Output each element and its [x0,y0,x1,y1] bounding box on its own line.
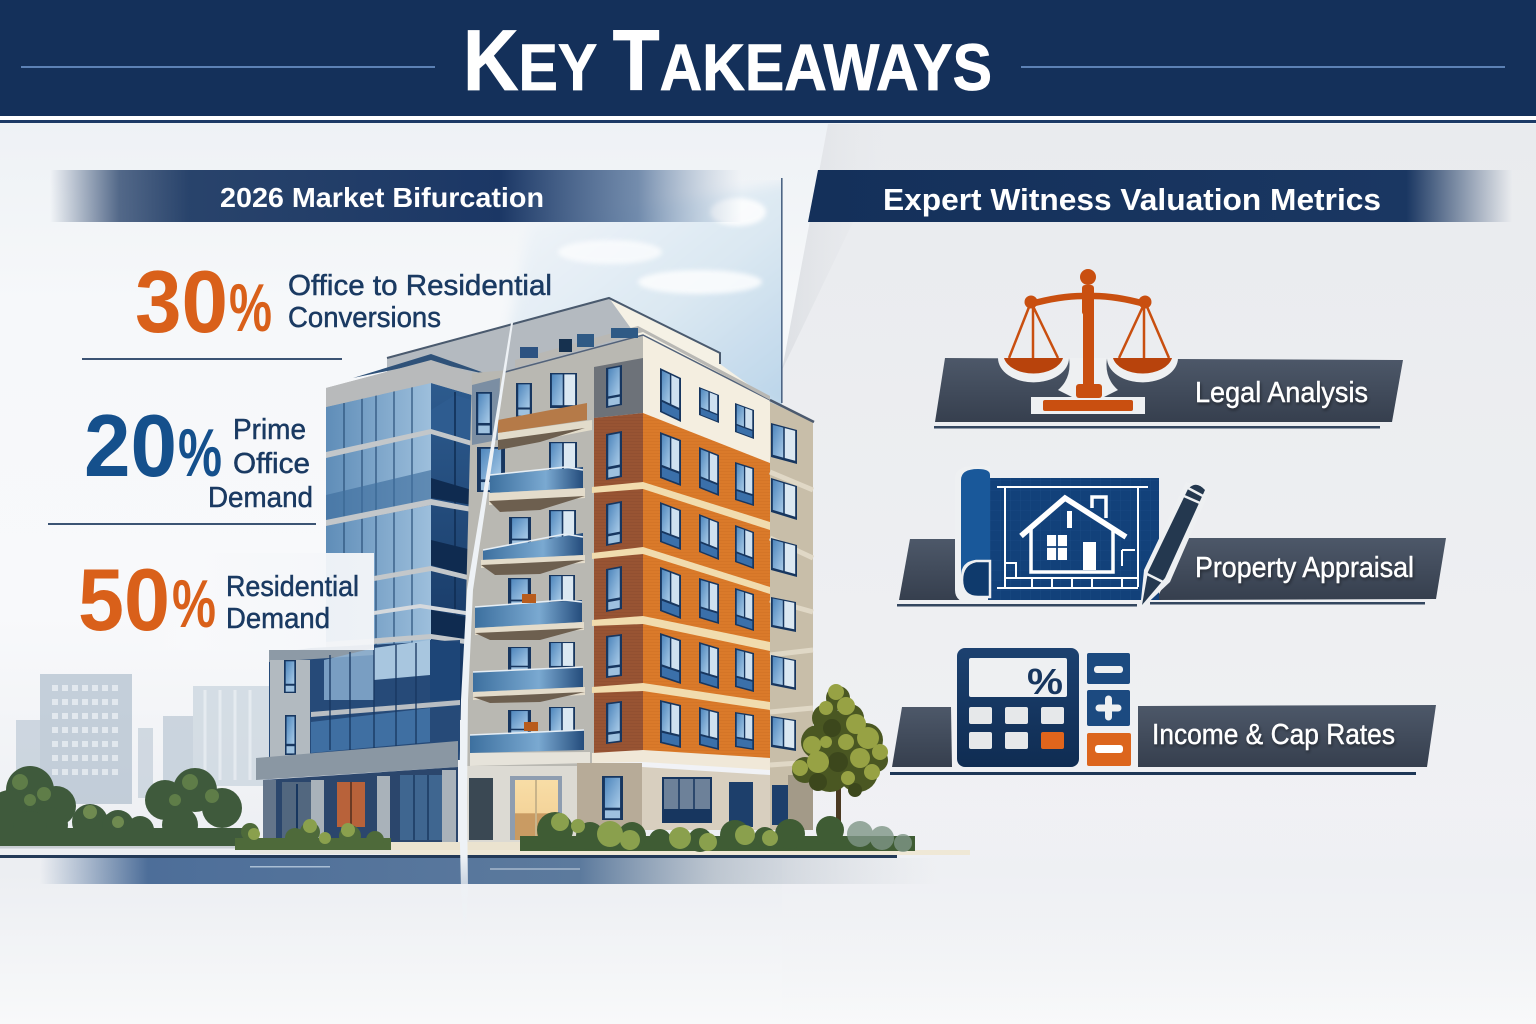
title: KEY TAKEAWAYS [463,13,992,109]
stat: 20 percent: Prime [233,414,306,446]
penthouse roof [387,298,770,400]
metric: property appraisal [897,466,1446,610]
left banner [50,170,742,222]
icon: pencil [1140,482,1210,610]
icon: blueprint [955,466,1159,603]
icon: calculator side keys [1087,653,1131,766]
building [256,298,814,843]
stat: 50 percent [78,550,359,649]
residential windows [477,365,797,751]
residential walls [460,326,814,830]
lower office block [256,640,460,843]
stat: 50 percent: Residential [226,571,359,603]
office tower [326,354,490,720]
metric: legal analysis [934,269,1403,428]
header band [0,0,1536,123]
skyline [16,674,269,804]
balconies [470,403,592,766]
icon: calculator [957,648,1079,767]
stat: 30 percent: 30 [135,252,228,351]
ground floor residential [462,763,813,842]
fold shadow [782,124,900,370]
icon: calculator: % [1027,661,1063,702]
right banner title: Expert Witness Valuation Metrics [883,182,1381,217]
label: Legal Analysis [1195,377,1368,409]
tree [792,684,888,828]
left stat backing [140,553,374,650]
label: Property Appraisal [1195,552,1414,584]
label: Income & Cap Rates [1152,719,1395,751]
stat: 20 percent: 20 [84,396,177,495]
stat: 50 percent: Demand [226,603,330,635]
stat: 20 percent [48,396,316,525]
left trees [0,766,248,846]
stat: 30 percent: Office to Residential [288,270,552,302]
right banner [808,170,1512,222]
right panel background [782,124,1536,1024]
vertical rule [781,178,783,403]
stat: 20 percent: Demand [208,482,313,514]
icon: scales of justice [998,269,1178,414]
stat: 20 percent: % [178,415,222,491]
stat: 50 percent: 50 [78,550,170,649]
metric: income and cap rates [890,648,1436,775]
ground and road [0,842,970,884]
divider sliver [459,323,513,950]
stat: 30 percent: Conversions [288,302,441,334]
sky and clouds [510,182,782,408]
stat: 20 percent: Office [233,448,310,480]
foreground bushes [235,812,915,852]
stat: 30 percent [82,252,552,360]
left banner title: 2026 Market Bifurcation [220,182,544,213]
stat: 30 percent: % [229,270,272,346]
stat: 50 percent: % [172,566,216,642]
